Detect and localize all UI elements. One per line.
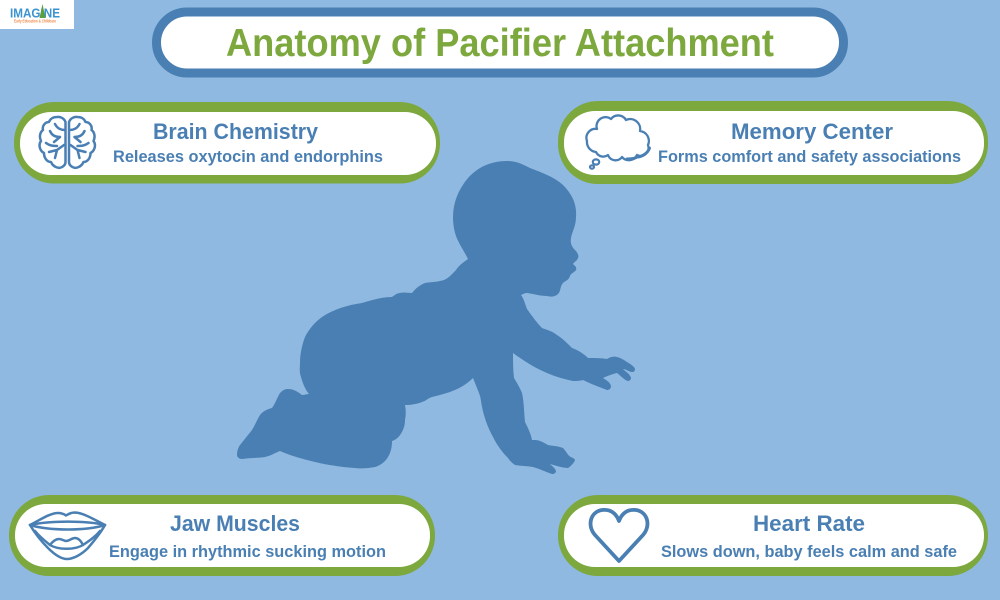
- description: Releases oxytocin and endorphins: [113, 147, 383, 166]
- heading: Jaw Muscles: [170, 511, 300, 536]
- icon: thought cloud: [586, 115, 650, 169]
- icon: lips: [30, 512, 105, 559]
- title: [156, 12, 844, 73]
- heading: Heart Rate: [753, 511, 865, 536]
- logo: Early Education & Childcare: [14, 18, 56, 24]
- description: Forms comfort and safety associations: [658, 147, 961, 166]
- panel: memory center: [558, 101, 988, 184]
- panel: brain chemistry: [14, 102, 440, 184]
- baby silhouette: [237, 161, 635, 474]
- heading: Brain Chemistry: [153, 119, 318, 144]
- description: Engage in rhythmic sucking motion: [109, 542, 386, 561]
- panel: jaw muscles: [9, 495, 435, 576]
- logo: IMAGINE: [10, 6, 60, 20]
- heading: Memory Center: [731, 119, 893, 144]
- logo: [0, 0, 74, 29]
- icon: heart: [591, 510, 647, 561]
- icon: brain: [40, 117, 95, 168]
- description: Slows down, baby feels calm and safe: [661, 542, 957, 561]
- title: Anatomy of Pacifier Attachment: [226, 22, 774, 65]
- panel: heart rate: [558, 495, 988, 576]
